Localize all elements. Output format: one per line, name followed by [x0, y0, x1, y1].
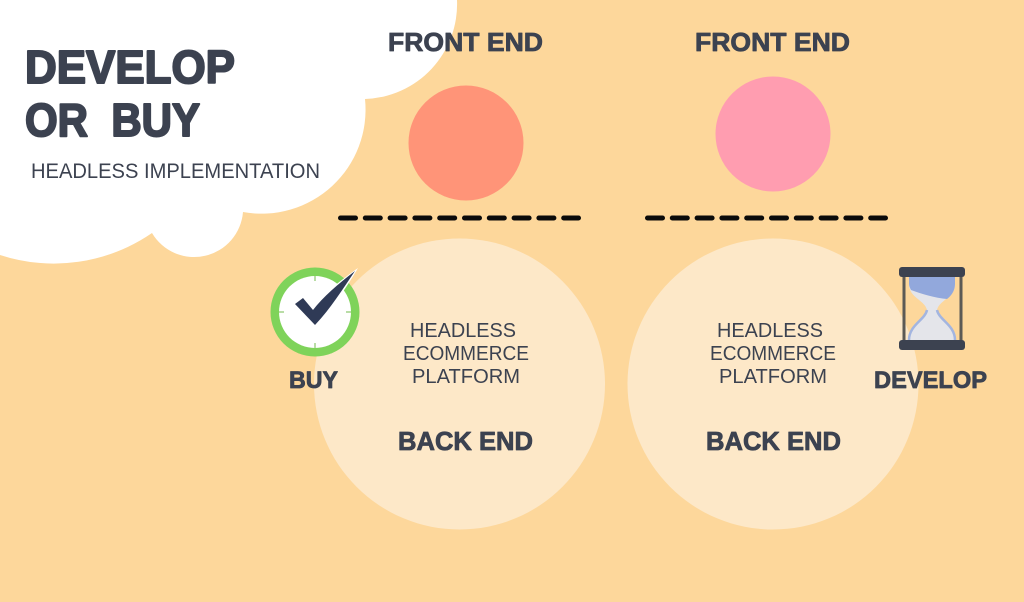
divider [648, 216, 886, 220]
panel: develop column [628, 27, 918, 530]
icon: hourglass [899, 267, 965, 350]
icon: clock with check mark [270, 268, 360, 356]
heading: back end: BACK END [706, 426, 841, 456]
platform label: HEADLESS [717, 320, 823, 342]
heading: back end: BACK END [398, 426, 533, 456]
back end circle [628, 238, 918, 530]
front end circle [716, 76, 830, 192]
heading: front end: FRONT END [695, 27, 850, 57]
white cloud [0, 0, 457, 264]
label: buy: BUY [289, 367, 338, 394]
platform label: ECOMMERCE [710, 343, 836, 365]
title [25, 41, 235, 146]
title: OR BUY [25, 94, 200, 146]
panel: buy column [314, 27, 605, 530]
heading: front end: FRONT END [388, 27, 543, 57]
platform label: PLATFORM [719, 366, 827, 388]
platform label: PLATFORM [412, 366, 520, 388]
back end circle [314, 238, 605, 530]
divider [340, 216, 578, 220]
platform label: ECOMMERCE [403, 343, 529, 365]
front end circle [408, 86, 524, 200]
platform label [710, 320, 836, 388]
subtitle: HEADLESS IMPLEMENTATION [31, 160, 320, 183]
label: develop: DEVELOP [874, 367, 987, 394]
platform label: HEADLESS [410, 320, 516, 342]
title: DEVELOP [25, 41, 235, 93]
platform label [403, 320, 529, 388]
